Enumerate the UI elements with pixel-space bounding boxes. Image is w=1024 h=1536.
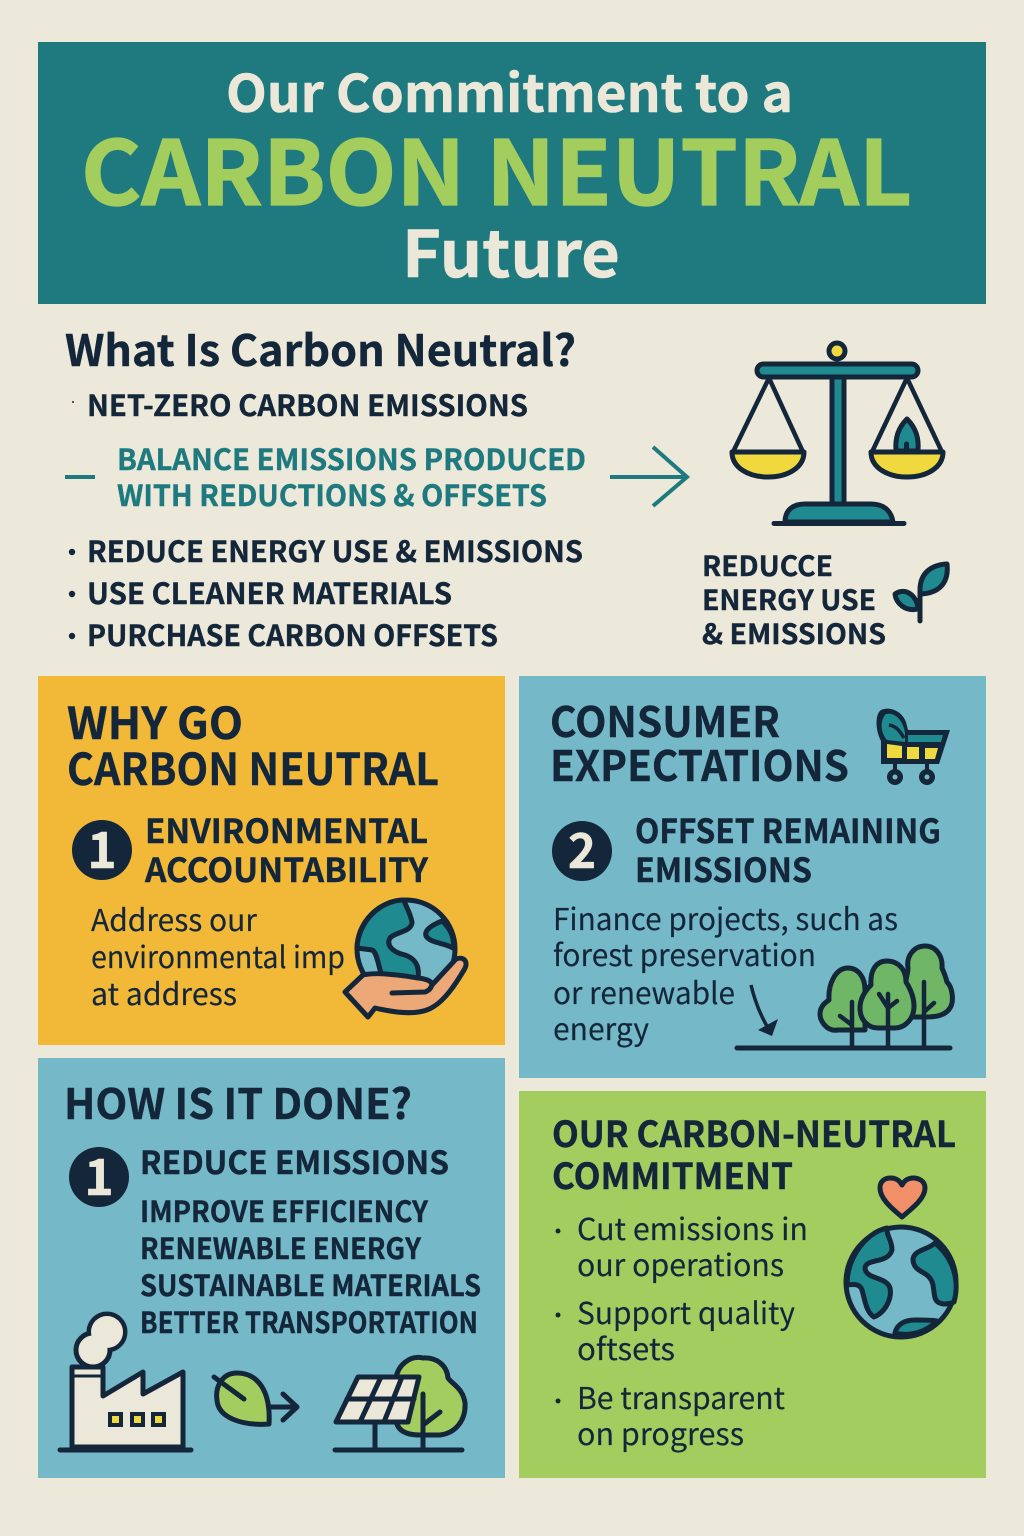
panel heading: OUR CARBON-NEUTRAL [552,1106,956,1158]
icon: globe in hand [345,900,466,1017]
number badge 2: 2 [568,812,596,882]
bullet list: REDUCE ENERGY USE & EMISSIONS [87,529,583,571]
icon: heart [880,1178,925,1217]
icon: sprout [895,564,947,621]
commitment list: Cut emissions in [577,1205,808,1249]
icon: leaf with arrow [214,1373,297,1424]
bullet list: PURCHASE CARBON OFFSETS [87,613,498,655]
panel heading: COMMITMENT [552,1148,793,1200]
panel heading: CARBON NEUTRAL [67,734,439,798]
panel heading: WHY GO [67,688,243,752]
reduce energy note [702,545,886,653]
balance statement: WITH REDUCTIONS & OFFSETS [117,473,547,515]
list of actions: IMPROVE EFFICIENCY [140,1189,429,1231]
icon: earth globe [846,1227,956,1337]
commitment list [556,1205,808,1454]
body text: or renewable [553,969,735,1013]
number badge 1 [69,1138,129,1210]
commitment list: on progress [577,1410,744,1454]
arrow to trees [751,985,778,1036]
body text [553,895,898,1049]
reduce energy note: ENERGY USE [702,579,876,619]
subheading: EMISSIONS [635,844,812,892]
list of actions [140,1189,481,1342]
body text [91,896,345,1014]
panel: how is it done [38,1058,505,1478]
subheading [635,805,941,892]
icon: balance scales [732,343,943,524]
body text: forest preservation [553,931,816,975]
icon: shopping cart [876,709,950,785]
title line 2: CARBON NEUTRAL [81,102,912,231]
definition line: NET-ZERO CARBON EMISSIONS [87,383,528,425]
title banner [38,42,986,304]
balance statement [65,437,586,515]
commitment list: oftsets [577,1325,675,1369]
icon: solar panel and tree [335,1357,465,1450]
commitment list: Be transparent [577,1374,785,1418]
icon: factory [60,1314,191,1450]
commitment list: Support quality [577,1289,795,1333]
subheading: ACCOUNTABILITY [144,844,429,892]
number badge 1: 1 [87,811,117,883]
number badge 1 [72,811,132,883]
subheading: ENVIRONMENTAL [145,805,428,853]
list of actions: SUSTAINABLE MATERIALS [140,1263,481,1305]
panel heading: HOW IS IT DONE? [64,1071,412,1132]
reduce energy note: & EMISSIONS [702,613,886,653]
body text: Finance projects, such as [553,895,898,939]
list of actions: RENEWABLE ENERGY [140,1226,422,1268]
body text: environmental imp [91,933,345,977]
bullet list [69,529,583,655]
reduce energy note: REDUCCE [702,545,833,585]
section: what is carbon neutral [65,317,947,655]
subheading: OFFSET REMAINING [635,805,941,853]
panel heading [67,688,439,798]
panel heading: CONSUMER [550,689,780,750]
panel: why go carbon neutral [38,676,505,1045]
panel heading [550,689,849,794]
subheading: REDUCE EMISSIONS [140,1138,449,1184]
number badge 1: 1 [84,1138,114,1210]
balance statement: BALANCE EMISSIONS PRODUCED [117,437,586,479]
icon: trees [737,946,952,1048]
panel heading: EXPECTATIONS [550,733,849,794]
body text: Address our [91,896,257,940]
body text: energy [553,1005,649,1049]
arrow to scales [610,447,687,506]
commitment list: our operations [577,1241,784,1285]
number badge 2 [552,812,612,882]
panel: consumer expectations [519,676,986,1078]
title line 1: Our Commitment to a [226,52,793,127]
panel: our carbon-neutral commitment [519,1091,986,1478]
bullet list: USE CLEANER MATERIALS [87,571,452,613]
title line 3: Future [402,204,620,296]
body text: at address [91,970,237,1014]
section heading: What Is Carbon Neutral? [65,317,576,379]
panel heading [552,1106,956,1200]
subheading [144,805,429,892]
list of actions: BETTER TRANSPORTATION [140,1300,478,1342]
